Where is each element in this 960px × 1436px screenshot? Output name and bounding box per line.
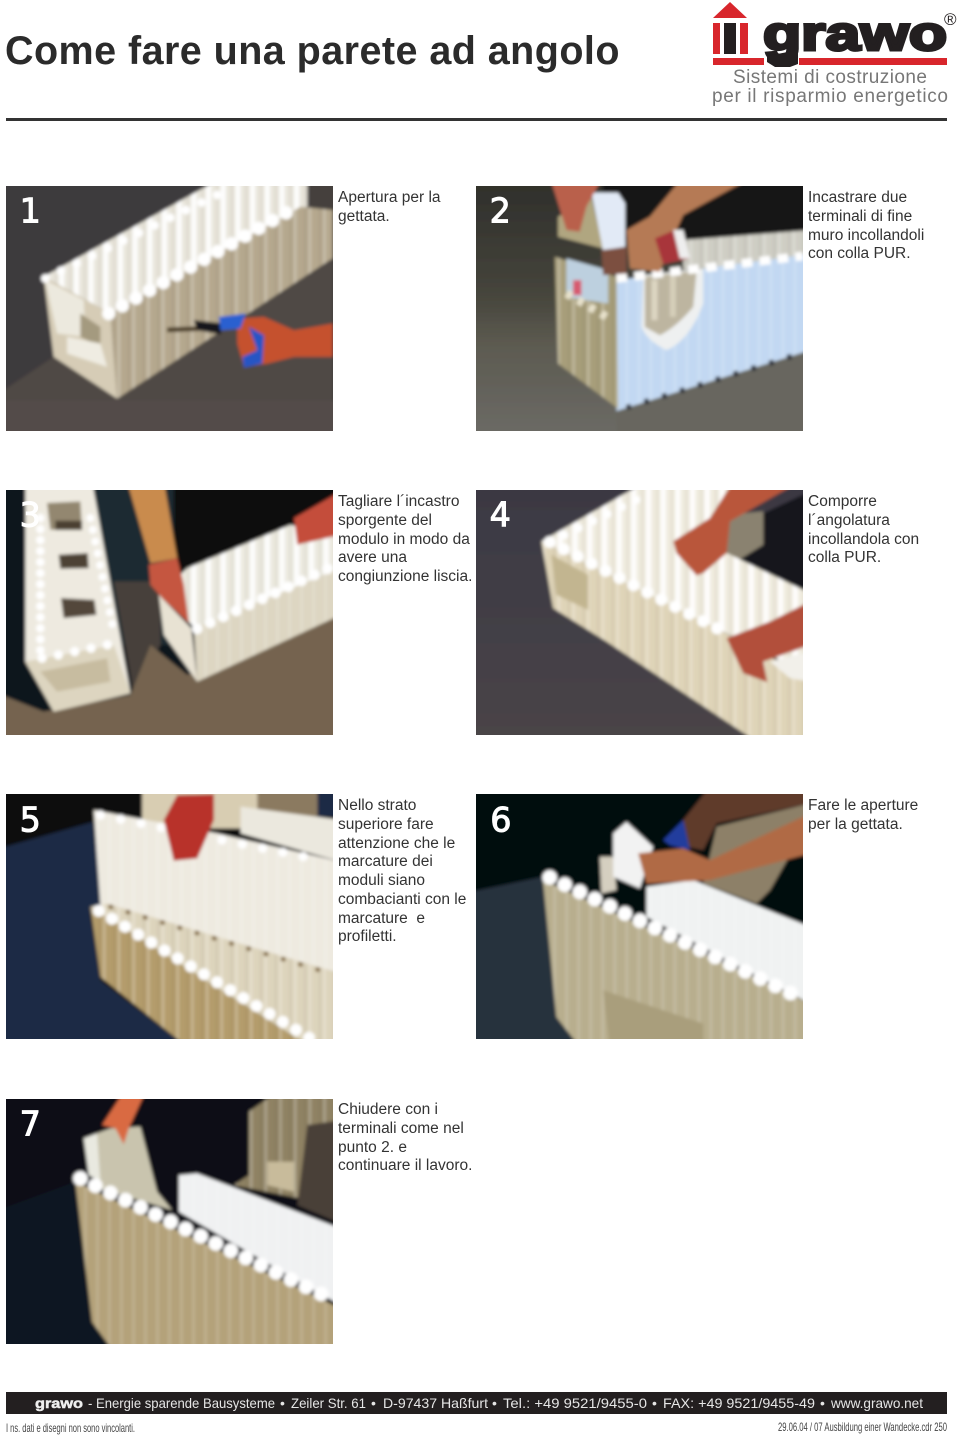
text: step 5	[338, 797, 466, 945]
text: step 6: Fare le aperture	[808, 797, 918, 814]
text: step 5: profiletti.	[338, 928, 397, 945]
icon: house	[713, 2, 748, 54]
text: step 7: terminali come nel	[338, 1120, 464, 1137]
text: step 7	[338, 1101, 472, 1174]
photo: step 1	[6, 186, 333, 431]
text: step 1: gettata.	[338, 208, 390, 225]
step number 7: 7	[20, 1105, 41, 1144]
text: step 4: colla PUR.	[808, 549, 881, 566]
footer address: Tel.: +49 9521/9455-0	[503, 1395, 647, 1411]
footer bar	[6, 1392, 947, 1414]
step number 4: 4	[490, 495, 511, 534]
footer address: •	[371, 1395, 376, 1411]
footer address: •	[652, 1395, 657, 1411]
footer address: - Energie sparende Bausysteme	[88, 1395, 275, 1411]
text: step 4	[808, 493, 919, 566]
text: step 6: per la gettata.	[808, 816, 903, 833]
photo: step 6	[476, 794, 803, 1039]
text: step 2: con colla PUR.	[808, 245, 911, 262]
text: step 3: Tagliare l´incastro	[338, 493, 459, 510]
text: step 6	[808, 797, 918, 833]
text: step 3	[338, 493, 472, 585]
brand name: grawo	[763, 8, 947, 61]
step number 5: 5	[20, 801, 41, 840]
photo: step 4	[476, 490, 803, 735]
step number 1: 1	[20, 191, 41, 230]
red logo bar	[713, 58, 947, 65]
text: step 5: marcature dei	[338, 853, 433, 870]
footer address: FAX: +49 9521/9455-49	[663, 1395, 815, 1411]
text: step 2: muro incollandoli	[808, 226, 924, 244]
text: step 5: marcature e	[338, 910, 425, 926]
footer address: •	[280, 1395, 285, 1411]
registered mark: ®	[944, 10, 957, 29]
footer address: www.grawo.net	[830, 1395, 923, 1411]
step number 3: 3	[20, 495, 41, 534]
text: step 7: Chiudere con i	[338, 1101, 438, 1118]
footer brand: grawo	[35, 1395, 83, 1411]
tagline line 1: Sistemi di costruzione	[733, 67, 927, 88]
text: step 1	[338, 189, 441, 225]
text: step 3: congiunzione liscia.	[338, 568, 472, 585]
text: step 5: combacianti con le	[338, 891, 466, 908]
footer address: •	[820, 1395, 825, 1411]
footer address: D-97437 Haßfurt	[383, 1395, 488, 1411]
text: step 7: punto 2. e	[338, 1138, 407, 1156]
photo: step 7	[6, 1099, 333, 1344]
photo: step 2	[476, 186, 803, 431]
text: step 5: attenzione che le	[338, 834, 455, 852]
text: step 4: Comporre	[808, 493, 877, 510]
step number 6: 6	[490, 801, 512, 840]
footer address: •	[492, 1395, 497, 1411]
text: step 4: l´angolatura	[808, 512, 890, 529]
text: step 5: Nello strato	[338, 797, 416, 814]
text: step 4: incollandola con	[808, 530, 919, 548]
text: step 5: moduli siano	[338, 872, 425, 889]
footer address	[88, 1395, 923, 1411]
text: step 2: terminali di fine	[808, 208, 912, 225]
brand name	[763, 8, 947, 67]
photo: step 5	[6, 794, 333, 1039]
text: step 3: modulo in modo da	[338, 530, 470, 548]
text: step 7: continuare il lavoro.	[338, 1157, 472, 1174]
footer address: Zeiler Str. 61	[291, 1395, 366, 1411]
title: Come fare una parete ad angolo	[5, 29, 620, 73]
text: step 1: Apertura per la	[338, 189, 441, 206]
disclaimer: I ns. dati e disegni non sono vincolanti.	[6, 1421, 135, 1435]
text: step 3: sporgente del	[338, 512, 432, 529]
step number 2: 2	[490, 191, 511, 230]
text: step 2	[808, 189, 924, 262]
logo: grawo	[712, 2, 957, 107]
tagline line 2: per il risparmio energetico	[712, 86, 948, 107]
text: step 2: Incastrare due	[808, 189, 907, 206]
photo: step 3	[6, 490, 333, 735]
text: step 3: avere una	[338, 549, 407, 566]
text: step 5: superiore fare	[338, 816, 434, 833]
